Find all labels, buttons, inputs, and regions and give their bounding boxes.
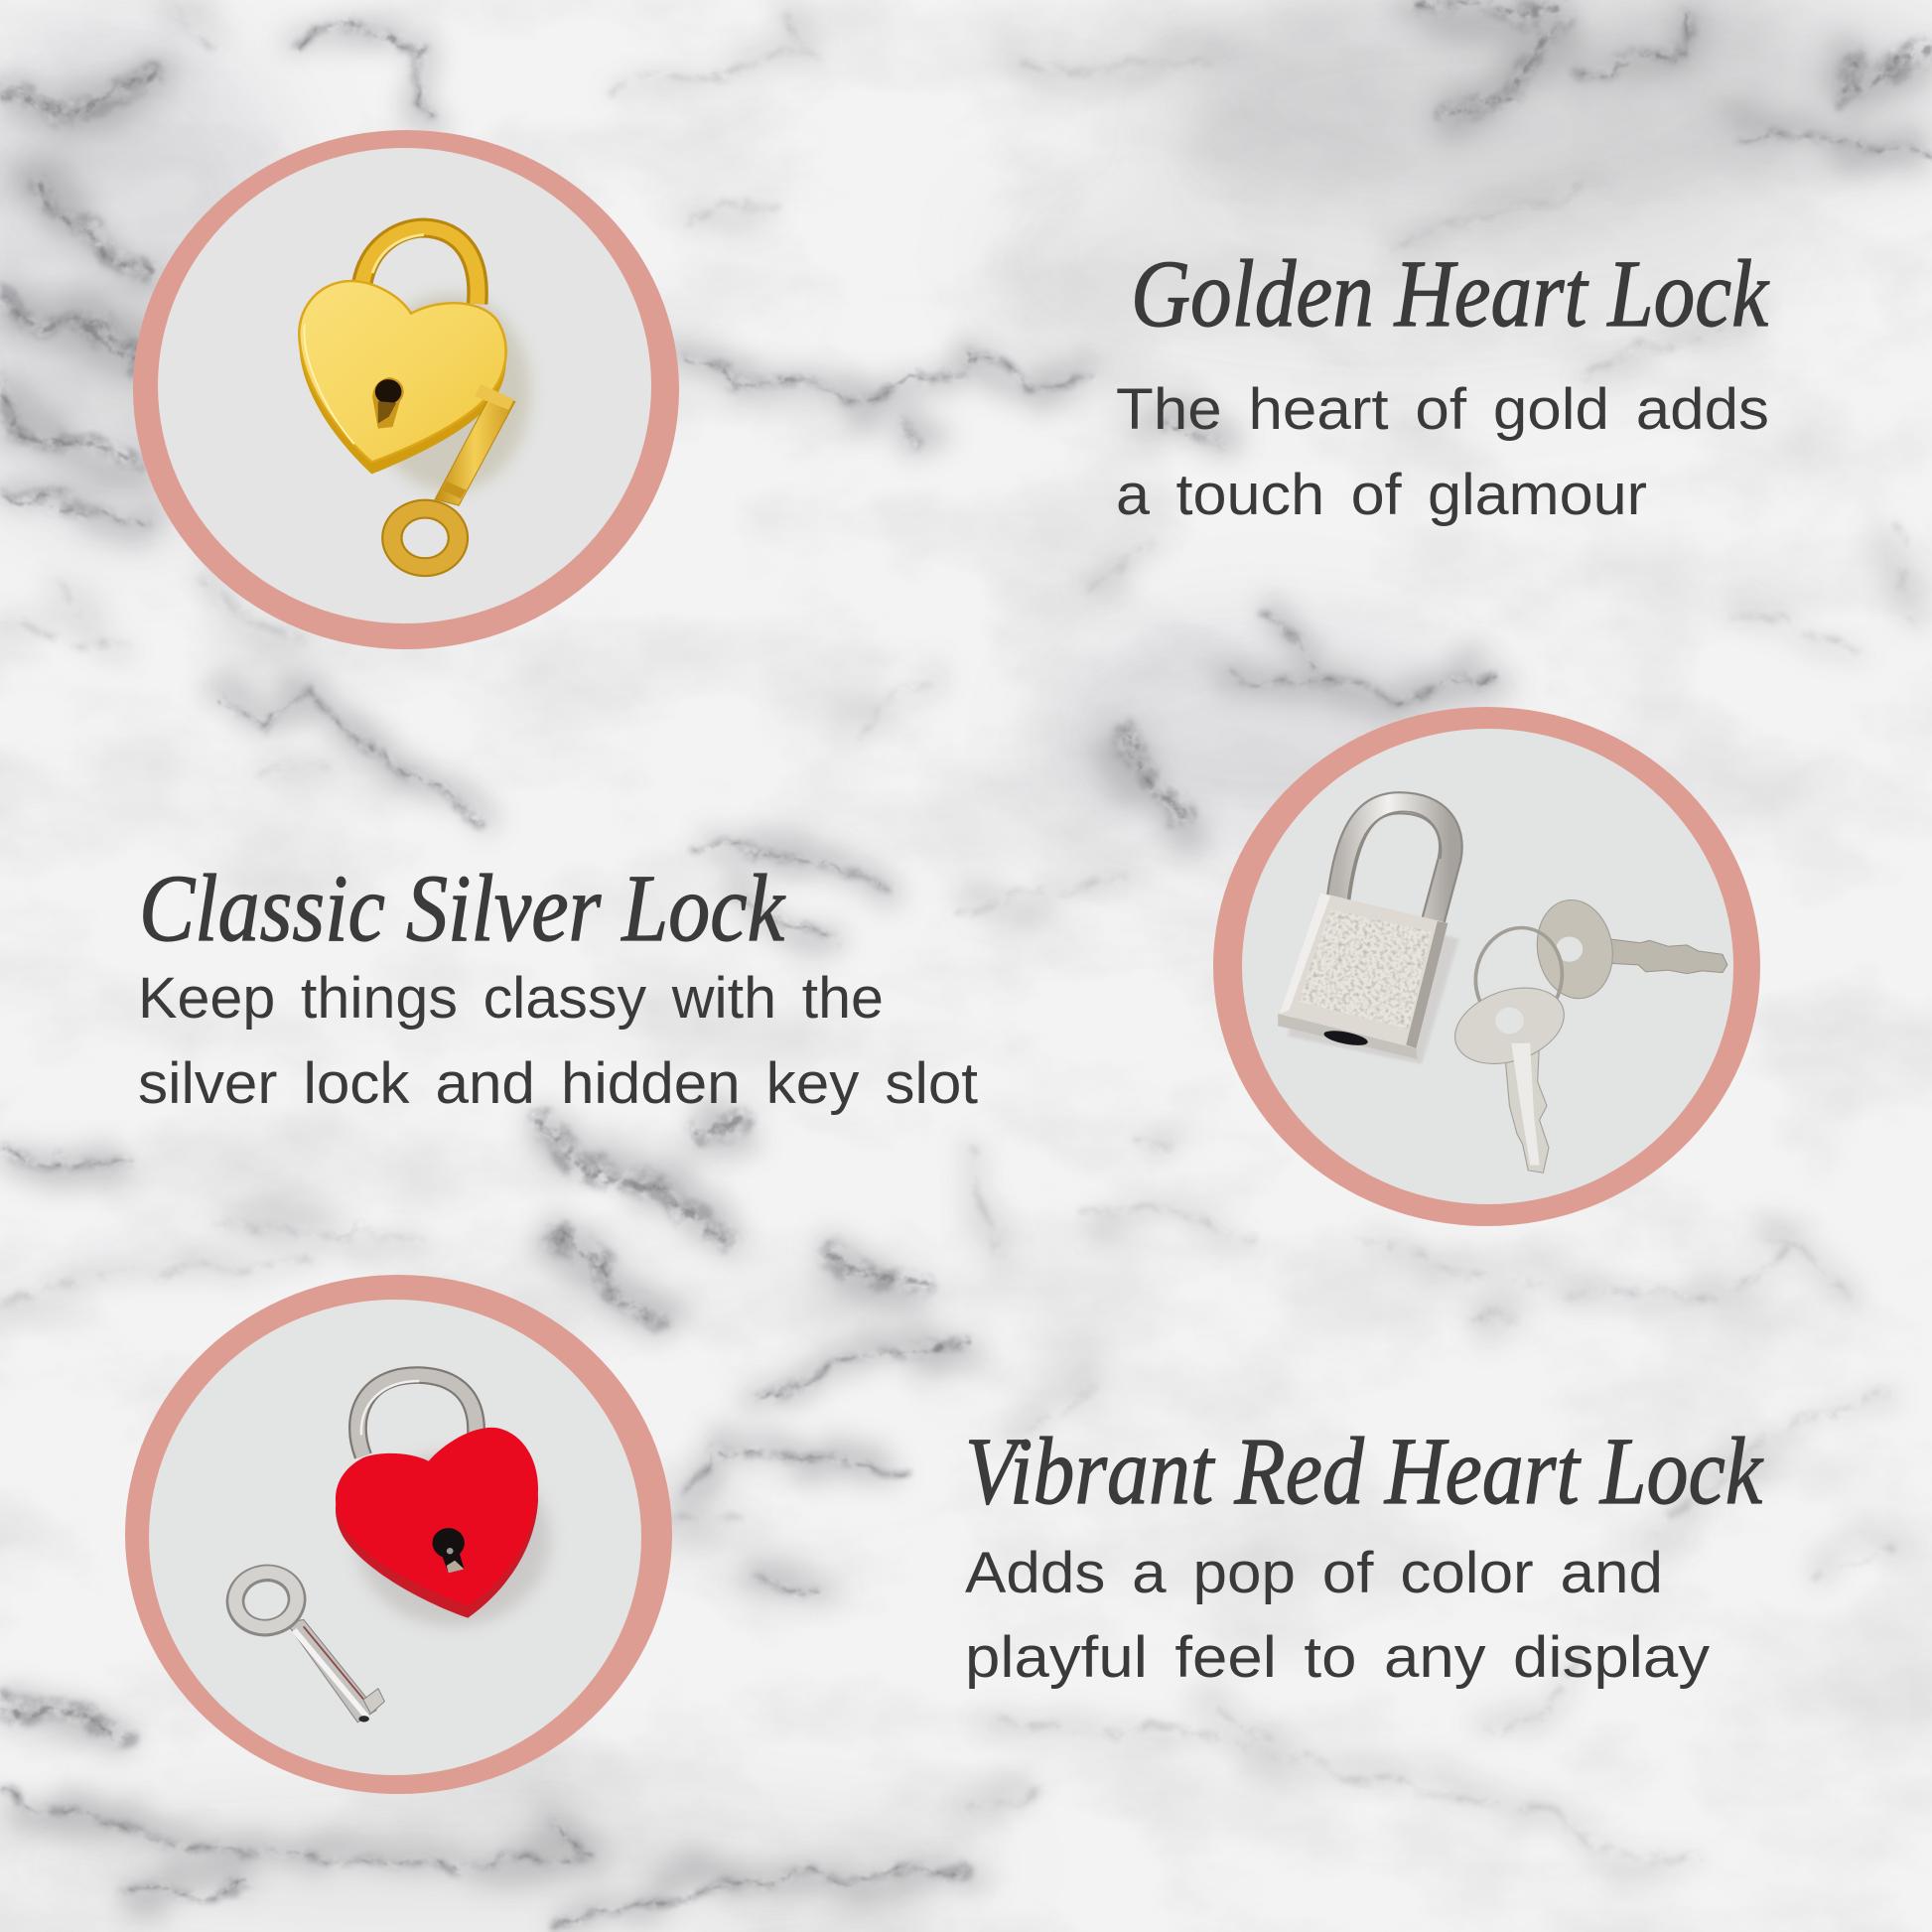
pink ring <box>1213 707 1760 1226</box>
heading: Classic Silver Lock <box>139 855 786 961</box>
description: Keep things classy with the <box>138 966 884 1031</box>
description: playful feel to any display <box>965 1625 1710 1690</box>
panel: classic silver lock photo <box>1213 707 1760 1226</box>
photo backdrop <box>158 148 651 623</box>
description: The heart of gold adds <box>1116 377 1769 442</box>
photo backdrop <box>1242 729 1733 1204</box>
description: silver lock and hidden key slot <box>138 1051 978 1116</box>
description <box>965 1541 1710 1690</box>
icon: silver padlock and two keys <box>1278 803 1727 1173</box>
panel: golden heart lock photo <box>133 130 679 649</box>
text block: classic silver lock <box>138 855 978 1116</box>
description <box>138 966 978 1116</box>
description <box>1116 377 1769 527</box>
text block: vibrant red heart lock <box>965 1418 1764 1690</box>
text block: golden heart lock <box>1116 240 1770 527</box>
panel: vibrant red heart lock photo <box>125 1275 672 1794</box>
photo backdrop <box>149 1300 641 1775</box>
heading: Golden Heart Lock <box>1131 240 1770 346</box>
heading: Vibrant Red Heart Lock <box>965 1418 1764 1524</box>
pink ring <box>133 130 679 649</box>
icon: red heart lock and silver key <box>227 1375 550 1723</box>
icon: golden lock and key <box>299 228 530 567</box>
description: Adds a pop of color and <box>965 1541 1663 1605</box>
description: a touch of glamour <box>1116 463 1647 527</box>
pink ring <box>125 1275 672 1794</box>
